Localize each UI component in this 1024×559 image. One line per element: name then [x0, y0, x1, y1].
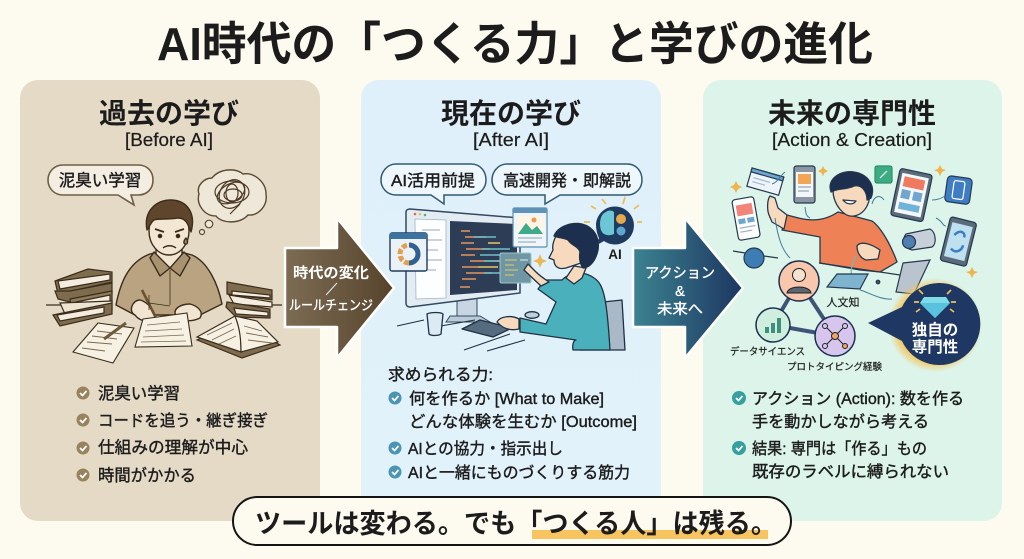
text: outcomes: 既存のラベルに縛られない — [752, 463, 949, 481]
label: data science: データサイエンス — [730, 345, 805, 358]
text: required skills: AIとの協力・指示出し — [408, 440, 563, 458]
badge: unique expertise — [868, 278, 982, 372]
checklist: past: 仕組みの理解が中心 — [98, 439, 248, 457]
checklist: past — [76, 385, 268, 485]
icon: AI brain — [584, 197, 642, 262]
title: AI時代の「つくる力」と学びの進化 — [157, 18, 873, 70]
illustration: open book — [197, 316, 280, 358]
icons: devices — [730, 165, 978, 299]
speech bubble: AI premise — [381, 164, 486, 204]
illustration: right stack of books — [226, 282, 272, 318]
text: required skills — [388, 366, 637, 482]
speech bubble: muddy learning — [48, 165, 153, 205]
label: humanities: 人文知 — [826, 295, 860, 309]
checklist: past: 泥臭い学習 — [98, 385, 180, 403]
arrow: era change — [285, 218, 394, 358]
icon: code overlay card — [500, 253, 531, 283]
icon: network circle — [815, 316, 855, 356]
icon: AI brain: AI — [608, 247, 622, 262]
text: required skills: AIと一緒にものづくりする筋力 — [408, 464, 630, 482]
label: prototyping: プロトタイピング経験 — [787, 361, 882, 373]
icon: gear window — [390, 233, 427, 271]
arrow: action and future — [633, 218, 743, 358]
panel: past learning — [20, 80, 320, 521]
illustration: man surrounded by devices — [768, 172, 900, 276]
text: required skills: 何を作るか [What to Make] — [409, 390, 604, 408]
badge: unique expertise: 独自の — [912, 321, 958, 339]
arrow: action and future: 未来へ — [657, 301, 703, 318]
icon: sparkle — [533, 254, 547, 268]
checklist: past: コードを追う・継ぎ接ぎ — [98, 412, 268, 430]
badge: unique expertise: 専門性 — [912, 337, 958, 356]
callout: tools change but makers remain — [233, 497, 791, 545]
checklist: past: 時間がかかる — [98, 467, 196, 485]
heading: past: 過去の学び — [99, 98, 239, 129]
diagram: skill network — [730, 261, 882, 373]
arrow: era change: 時代の変化 — [293, 265, 370, 282]
text: outcomes: 手を動かしながら考える — [752, 413, 929, 431]
subheading: before AI: [Before AI] — [125, 130, 213, 150]
heading: future: 未来の専門性 — [768, 98, 936, 129]
illustration: left stack of books — [53, 269, 112, 326]
callout: tools change but makers remain: ツールは変わる。でも「つくる人」は残る。 — [255, 509, 777, 539]
text: outcomes: 結果: 専門は「作る」もの — [752, 440, 927, 458]
text: required skills: 求められる力: — [388, 366, 493, 384]
heading: present: 現在の学び — [441, 98, 581, 129]
text: required skills: どんな体験を生むか [Outcome] — [409, 413, 637, 431]
thought bubble with scribble — [198, 170, 266, 234]
subheading: after AI: [After AI] — [473, 130, 549, 150]
icon: chart circle — [756, 308, 790, 342]
icon: person circle — [779, 261, 819, 301]
speech bubble: muddy learning: 泥臭い学習 — [59, 171, 141, 190]
illustration: man studying at desk — [46, 200, 282, 322]
illustration: papers and pen — [73, 313, 192, 363]
panel: present learning — [361, 80, 661, 521]
illustration: man with monitor and keyboard — [397, 224, 625, 351]
speech bubble: AI premise: AI活用前提 — [391, 172, 475, 190]
panel: future expertise — [703, 80, 1002, 521]
arrow: era change: ルールチェンジ — [289, 298, 373, 313]
text: outcomes: アクション (Action): 数を作る — [752, 390, 964, 408]
subheading: action and creation: [Action & Creation] — [772, 130, 932, 150]
arrow: action and future: & — [675, 284, 685, 300]
arrow: action and future: アクション — [645, 265, 715, 282]
illustration: computer monitor with code — [406, 209, 520, 322]
speech bubble: rapid development — [492, 164, 642, 204]
text: outcomes — [732, 390, 964, 481]
icon: image window — [513, 208, 547, 247]
speech bubble: rapid development: 高速開発・即解説 — [503, 172, 631, 190]
